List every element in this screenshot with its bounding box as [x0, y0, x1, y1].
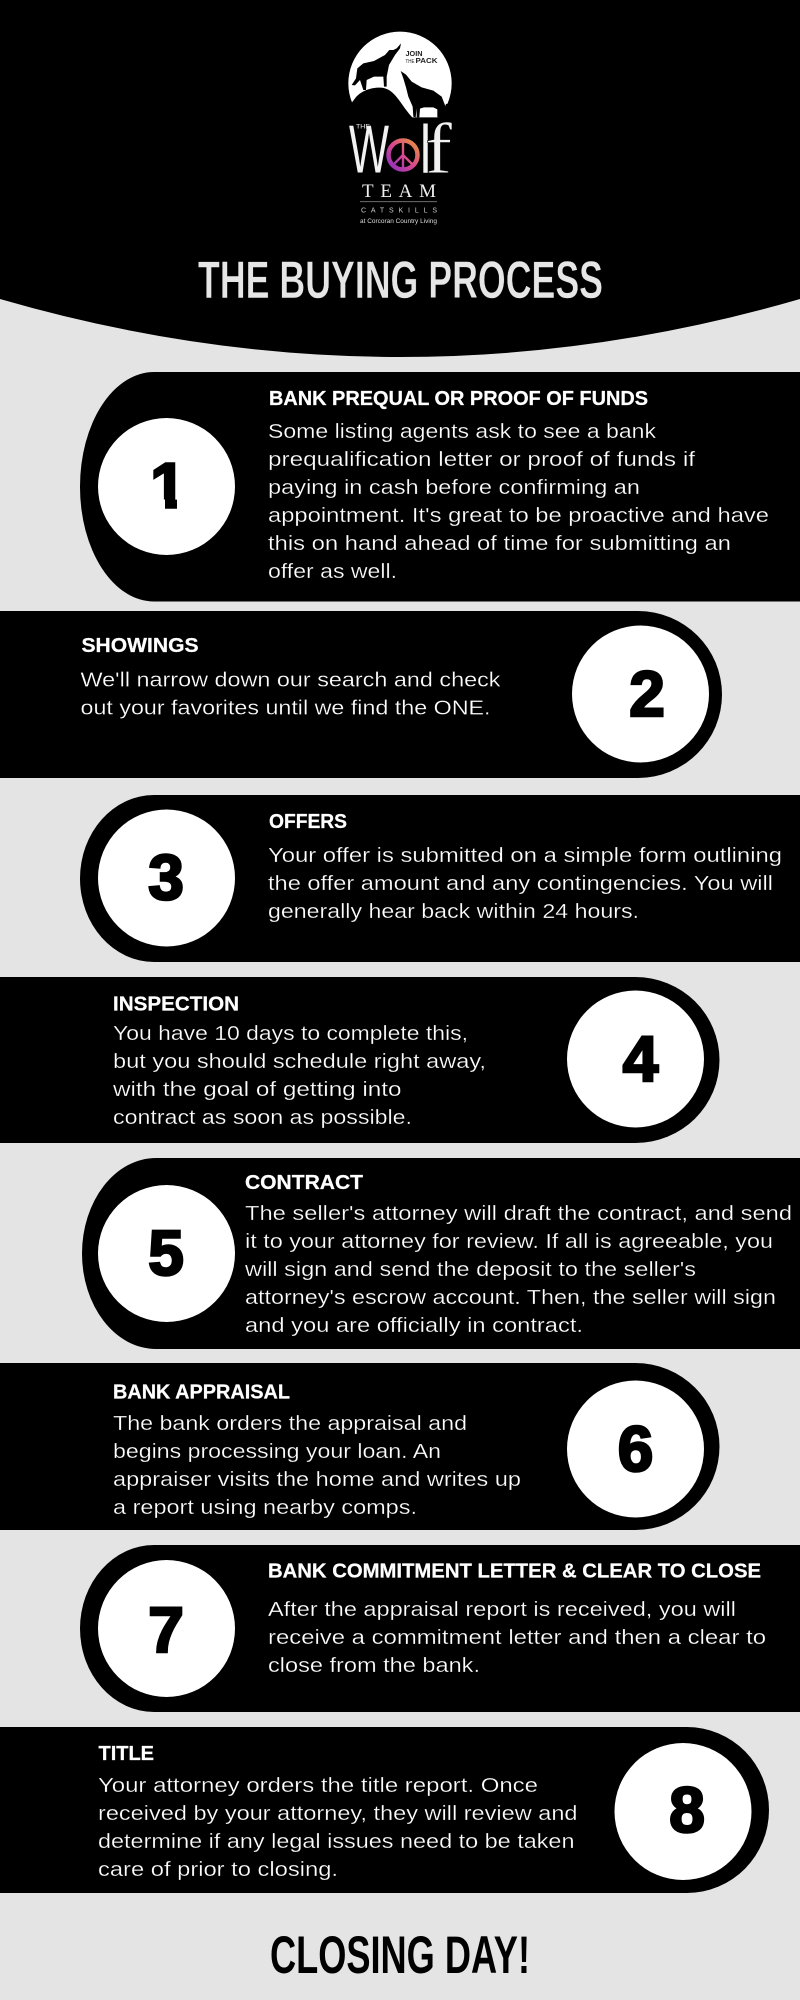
number badge 5 — [98, 1185, 235, 1322]
logo wordmark: the wolf: f — [425, 108, 452, 188]
body text: step 4: with the goal of getting into — [112, 1078, 402, 1101]
panel: step 3 offers — [80, 795, 800, 962]
body text: step 1: appointment. It's great to be proactive and have — [268, 504, 769, 527]
body text: step 6: The bank orders the appraisal and — [113, 1412, 467, 1435]
body text: step 8: determine if any legal issues need to be taken — [98, 1830, 574, 1853]
panel: step 8 title — [0, 1727, 769, 1893]
logo text: team catskills: at Corcoran Country Living — [360, 218, 437, 225]
number badge 3 — [98, 810, 235, 946]
heading: step 2: SHOWINGS — [82, 635, 198, 657]
number badge 8: 8 — [669, 1774, 705, 1846]
body text: step 5: will sign and send the deposit to the seller's — [244, 1258, 696, 1281]
body text: step 7: After the appraisal report is received, you will — [268, 1598, 736, 1621]
number badge 1: 1 — [150, 450, 186, 522]
panel: step 6 bank appraisal — [0, 1363, 720, 1530]
logo: The Wolf Team — [340, 32, 460, 225]
heading: step 7: BANK COMMITMENT LETTER & CLEAR TO CLOSE — [268, 1560, 761, 1582]
panel: step 2 showings — [0, 611, 722, 778]
body text: step 3: Your offer is submitted on a simple form outlining — [268, 844, 782, 867]
body text: step 6: appraiser visits the home and writes up — [113, 1468, 521, 1491]
body text: step 1: paying in cash before confirming an — [268, 476, 640, 499]
body text: step 7 — [268, 1598, 766, 1677]
body text: step 4: but you should schedule right away, — [113, 1050, 486, 1073]
panel: step 5 contract — [82, 1158, 800, 1349]
body text: step 2 — [80, 668, 501, 720]
logo wordmark: the wolf: l — [420, 112, 431, 188]
body text: step 8: Your attorney orders the title report. Once — [98, 1774, 538, 1797]
number badge 6: 6 — [618, 1413, 653, 1485]
body text: step 1: prequalification letter or proof of funds if — [268, 448, 695, 471]
body text: step 6: begins processing your loan. An — [113, 1440, 441, 1463]
logo text: join the pack: JOIN — [406, 51, 422, 58]
body text: step 6: a report using nearby comps. — [113, 1496, 417, 1519]
number badge 4 — [567, 990, 704, 1128]
logo text: team catskills: TEAM — [362, 181, 436, 202]
panel: step 7 commitment letter — [80, 1545, 800, 1712]
body text: step 5: The seller's attorney will draft the contract, and send — [245, 1202, 792, 1225]
panel: step 4 inspection — [0, 977, 720, 1143]
body text: step 4: contract as soon as possible. — [113, 1106, 412, 1129]
heading: step 8: TITLE — [98, 1743, 154, 1765]
logo text: join the pack: THE — [406, 59, 415, 65]
icon: moon with howling wolves — [340, 32, 460, 140]
body text: step 4 — [112, 1022, 486, 1129]
heading: step 1: BANK PREQUAL OR PROOF OF FUNDS — [269, 388, 648, 410]
closing heading: CLOSING DAY! — [270, 1926, 530, 1985]
body text: step 1 — [268, 420, 769, 583]
body text: step 5: attorney's escrow account. Then, the seller will sign — [245, 1286, 776, 1309]
body text: step 3: generally hear back within 24 hours. — [268, 900, 639, 923]
icon: peace sign — [388, 140, 418, 170]
number badge 1 — [98, 418, 235, 555]
body text: step 8: received by your attorney, they will review and — [98, 1802, 578, 1825]
body text: step 7: receive a commitment letter and then a clear to — [268, 1626, 766, 1649]
body text: step 5: and you are officially in contract. — [245, 1314, 583, 1337]
body text: step 8: care of prior to closing. — [98, 1858, 338, 1881]
body text: step 1: offer as well. — [268, 560, 397, 583]
body text: step 2: We'll narrow down our search and check — [80, 668, 501, 692]
number badge 7: 7 — [148, 1594, 184, 1666]
body text: step 7: close from the bank. — [268, 1654, 480, 1677]
body text: step 8 — [98, 1774, 578, 1881]
number badge 2 — [572, 626, 709, 762]
number badge 8 — [614, 1743, 752, 1880]
heading: step 5: CONTRACT — [245, 1172, 363, 1194]
number badge 4: 4 — [623, 1023, 659, 1095]
logo text: team catskills — [360, 181, 437, 225]
body text: step 1: Some listing agents ask to see a bank — [268, 420, 657, 443]
body text: step 3: the offer amount and any contingencies. You will — [268, 872, 773, 895]
header banner — [0, 0, 800, 357]
heading: step 3: OFFERS — [269, 811, 347, 833]
heading: step 6: BANK APPRAISAL — [113, 1382, 290, 1404]
body text: step 5 — [244, 1202, 792, 1337]
number badge 7 — [98, 1560, 235, 1697]
number badge 3: 3 — [148, 842, 184, 914]
logo text: join the pack — [406, 51, 438, 65]
title: THE BUYING PROCESS — [198, 251, 603, 310]
body text: step 6 — [113, 1412, 521, 1519]
body text: step 3 — [268, 844, 782, 923]
logo wordmark: the wolf — [349, 108, 452, 188]
body text: step 2: out your favorites until we find the ONE. — [80, 696, 490, 720]
logo wordmark: the wolf: W — [349, 112, 389, 188]
number badge 2: 2 — [629, 658, 665, 730]
body text: step 1: this on hand ahead of time for submitting an — [268, 532, 731, 555]
body text: step 5: it to your attorney for review. If all is agreeable, you — [245, 1230, 773, 1253]
number badge 6 — [567, 1380, 704, 1518]
logo text: join the pack: PACK — [416, 58, 438, 65]
heading: step 4: INSPECTION — [113, 994, 239, 1016]
panel: step 1 bank prequal — [80, 372, 800, 602]
body text: step 4: You have 10 days to complete this, — [113, 1022, 468, 1045]
logo wordmark: the wolf: THE — [356, 124, 371, 130]
number badge 5: 5 — [148, 1217, 184, 1289]
logo text: team catskills: CATSKILLS — [361, 208, 437, 214]
